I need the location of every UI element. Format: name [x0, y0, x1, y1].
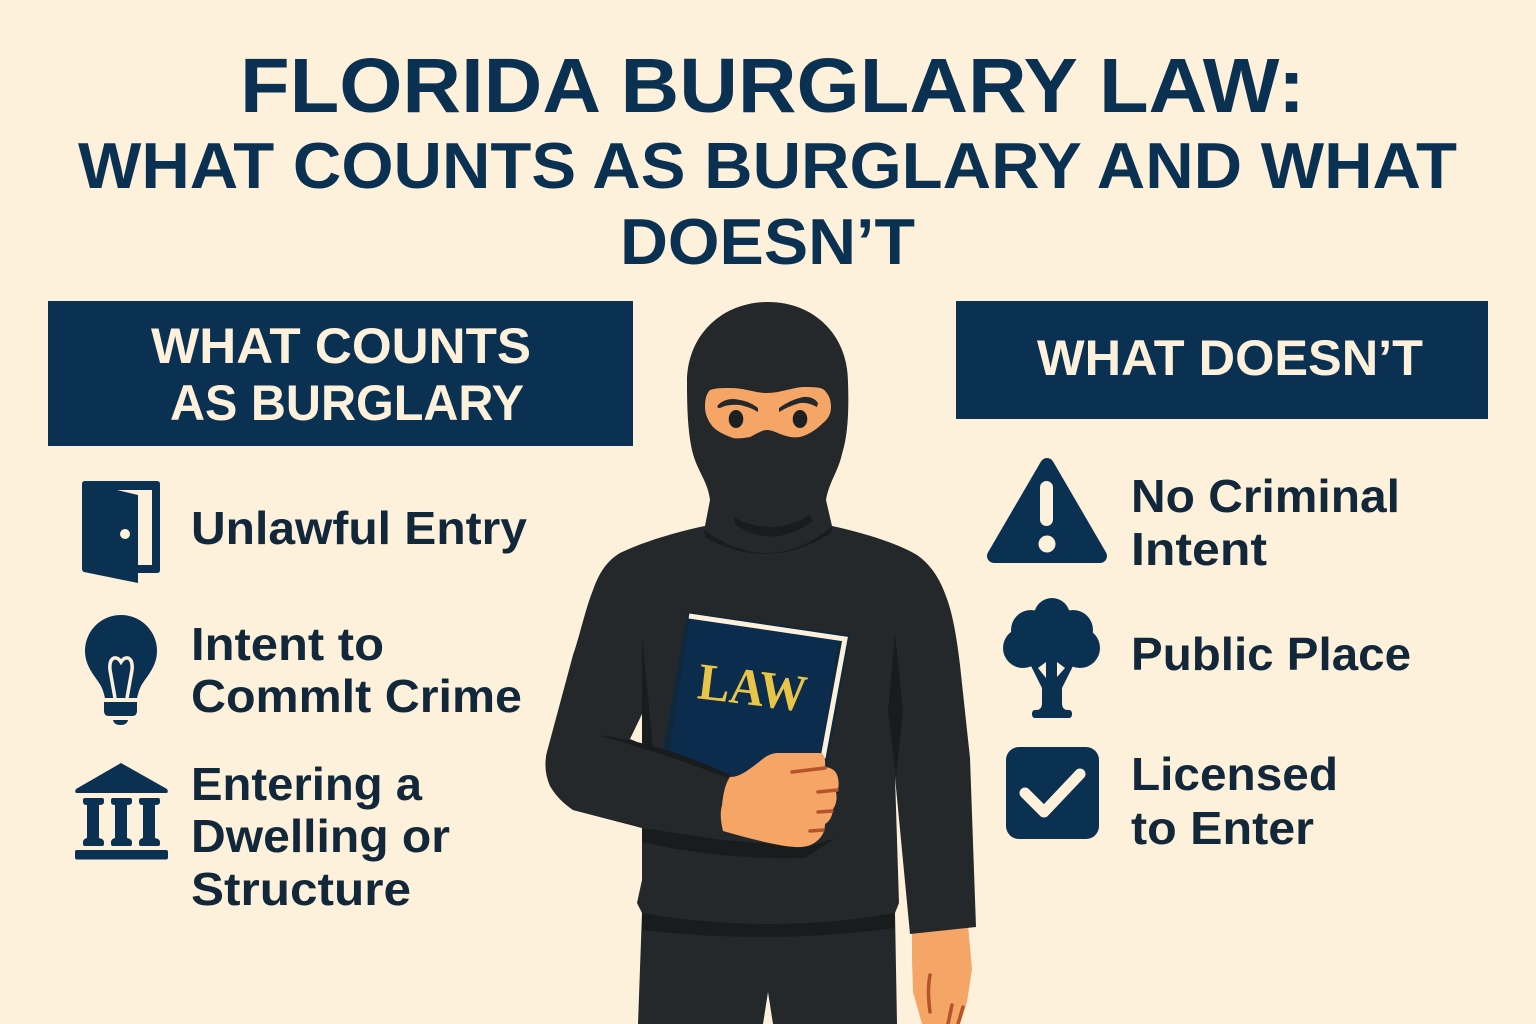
label: licensed to enter: to Enter: [1131, 802, 1314, 854]
torso and arms: [545, 526, 976, 1024]
heading banner: what counts: [48, 301, 633, 446]
forearm: [546, 735, 730, 835]
label: no criminal intent: [1131, 470, 1400, 575]
label: entering a dwelling or structure: Structure: [191, 863, 411, 915]
label: licensed to enter: [1131, 748, 1338, 854]
illustration: masked burglar holding law book: [545, 302, 976, 1024]
icon: checkbox: [1006, 747, 1099, 839]
label: entering a dwelling or structure: [191, 758, 450, 915]
label: entering a dwelling or structure: Entering a: [191, 758, 422, 810]
icon: open door: [82, 481, 160, 583]
label: intent to commit crime: [191, 618, 522, 722]
panel: what doesn't count: [956, 301, 1488, 854]
title: DOESN’T: [620, 205, 915, 278]
title: FLORIDA BURGLARY LAW:: [240, 43, 1305, 129]
law book: [663, 612, 850, 776]
icon: warning triangle: [994, 465, 1100, 556]
panel: what counts as burglary: [48, 301, 633, 915]
label: no criminal intent: No Criminal: [1131, 470, 1400, 522]
label: licensed to enter: Licensed: [1131, 748, 1338, 800]
icon: columned building: [75, 763, 168, 860]
label: intent to commit crime: Intent to: [191, 618, 384, 670]
book title: LAW: [695, 654, 810, 723]
hand holding book: [721, 753, 839, 847]
label: entering a dwelling or structure: Dwelling or: [191, 810, 450, 862]
head in balaclava: [687, 302, 848, 559]
title: WHAT COUNTS AS BURGLARY AND WHAT: [78, 129, 1457, 202]
label: public place: Public Place: [1131, 628, 1411, 680]
label: intent to commit crime: Commlt Crime: [191, 670, 522, 722]
heading banner: what counts: WHAT COUNTS: [151, 318, 531, 374]
label: no criminal intent: Intent: [1131, 523, 1267, 575]
lower hand: [912, 925, 972, 1024]
eye opening: [705, 387, 831, 438]
heading banner: what counts: AS BURGLARY: [170, 375, 524, 431]
label: unlawful entry: Unlawful Entry: [191, 502, 527, 554]
heading banner: what doesn't: [956, 301, 1488, 419]
heading banner: what doesn't: WHAT DOESN’T: [1037, 330, 1423, 386]
icon: light bulb: [85, 615, 157, 725]
title: [78, 43, 1457, 278]
icon: tree: [1003, 598, 1100, 718]
